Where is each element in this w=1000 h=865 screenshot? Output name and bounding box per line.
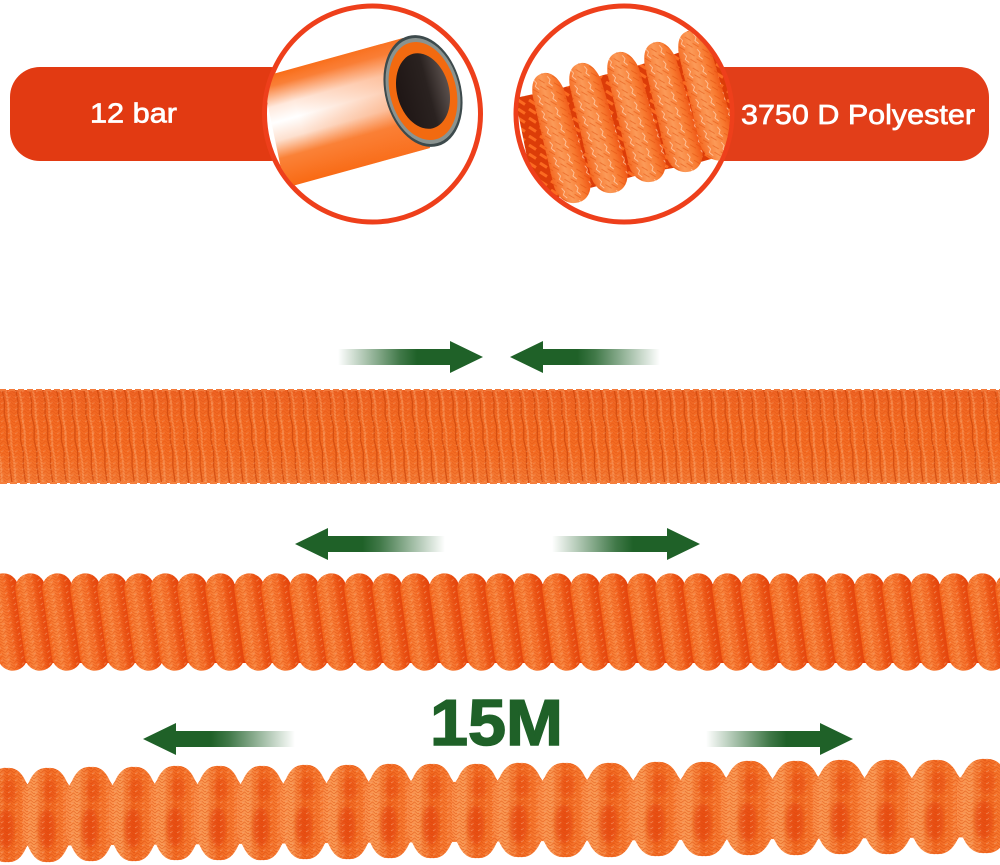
arrow: stretch left xyxy=(295,528,445,560)
icon: inner tube xyxy=(267,35,463,186)
hose: partly expanded coils xyxy=(0,571,1000,673)
arrow: stretch right xyxy=(552,528,700,560)
arrow: full stretch right xyxy=(706,723,853,755)
hose: fully expanded wavy coils xyxy=(0,759,1000,862)
heading: 15M length: 15M xyxy=(430,686,563,759)
arrow: compress left xyxy=(510,341,660,373)
arrow: compress right xyxy=(338,341,483,373)
panel: 12 bar callout xyxy=(10,6,480,222)
label text: 12 bar: 12 bar xyxy=(90,98,177,128)
label pill: 12 bar xyxy=(10,67,300,161)
label pill: 3750 D Polyester xyxy=(690,67,989,161)
panel: 3750 D Polyester callout xyxy=(515,6,989,222)
magnifier circle: tube cross-section xyxy=(262,6,480,222)
arrow: full stretch left xyxy=(143,723,295,755)
magnifier circle: braided cover xyxy=(515,6,741,222)
label text: 3750 D Polyester: 3750 D Polyester xyxy=(741,99,975,130)
icon: polyester braid coils xyxy=(518,30,730,204)
hose: relaxed, tight coils xyxy=(0,390,1000,483)
